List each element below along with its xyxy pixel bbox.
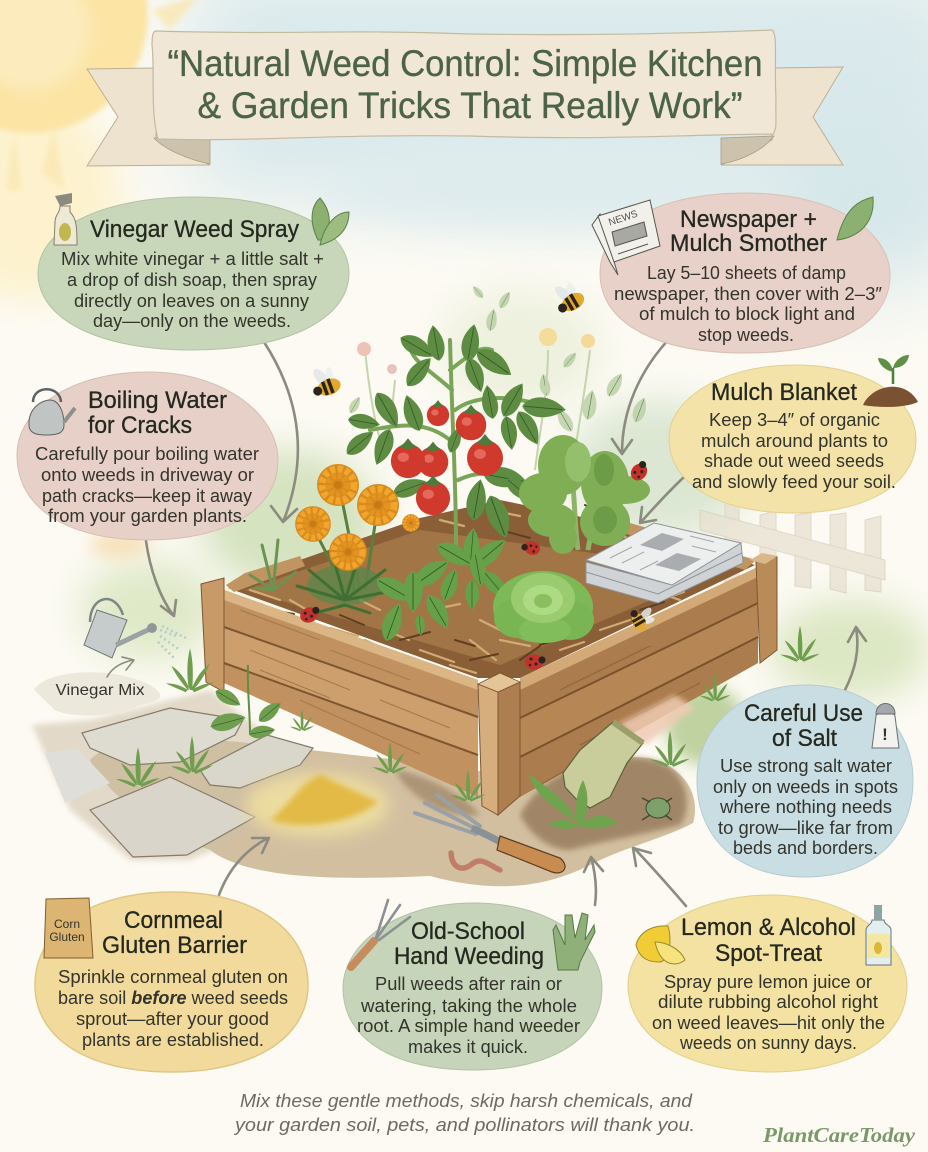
marigolds <box>250 464 420 613</box>
heading line 2: for Cracks <box>88 412 192 439</box>
icon: glove <box>553 913 595 970</box>
arm <box>618 695 695 745</box>
arrow: boiling water to path <box>146 541 176 616</box>
icon: ladybug rim <box>298 604 322 625</box>
panel: vinegar weed spray <box>38 193 349 350</box>
soil and mulch <box>228 500 755 678</box>
icon: newspaper label: NEWS <box>607 209 640 228</box>
panel: boiling water for cracks <box>17 372 278 540</box>
icon: leaf <box>312 198 349 245</box>
icon: newspaper <box>592 200 660 275</box>
panel: cornmeal gluten barrier <box>35 892 308 1072</box>
label: vinegar mix: Vinegar Mix <box>56 682 144 699</box>
icon: corn gluten bag: Gluten <box>49 930 85 944</box>
heading line 1: Newspaper + <box>680 206 817 233</box>
body text: shade out weed seeds <box>704 451 884 471</box>
arrow: salt to grass <box>845 627 866 690</box>
watering can <box>84 599 186 658</box>
background foliage <box>80 284 928 765</box>
lettuce <box>493 571 594 643</box>
fence <box>700 496 885 593</box>
raised garden bed <box>201 500 778 815</box>
panel: old-school hand weeding <box>343 900 602 1070</box>
body text: Lay 5–10 sheets of damp <box>647 263 846 283</box>
icon: soil sprout <box>863 355 918 407</box>
body text: of mulch to block light and <box>639 304 855 324</box>
icon: sun <box>0 0 200 190</box>
icon: spray bottle <box>54 193 77 245</box>
body text <box>61 249 324 331</box>
body text: dilute rubbing alcohol right <box>658 992 878 1012</box>
title banner <box>87 30 843 166</box>
icon: leaf <box>837 197 873 240</box>
heading line 1: Careful Use <box>744 700 863 727</box>
body text: Carefully pour boiling water <box>35 444 259 464</box>
arrow: vinegar mix <box>107 657 134 677</box>
body text: on weed leaves—hit only the <box>652 1013 885 1033</box>
arrow: newspaper to bed <box>612 338 670 454</box>
back rim <box>226 520 756 592</box>
brand mark: PlantCareToday <box>762 1123 916 1147</box>
body text: to grow—like far from <box>718 818 893 838</box>
body text: sprout—after your good <box>76 1009 269 1029</box>
banner body <box>152 30 776 140</box>
heading line 2: of Salt <box>772 725 837 752</box>
body text: and slowly feed your soil. <box>692 472 896 492</box>
body text: newspaper, then cover with 2–3″ <box>614 284 883 304</box>
body text: mulch around plants to <box>701 431 888 451</box>
panel: newspaper and mulch smother <box>592 193 890 353</box>
icon: hand weeder <box>351 900 410 967</box>
body text: Keep 3–4″ of organic <box>709 410 880 430</box>
body text: plants are established. <box>82 1030 264 1050</box>
heading line 1: Boiling Water <box>88 387 227 414</box>
post: front <box>478 673 520 815</box>
heading line 2: Spot-Treat <box>715 940 822 967</box>
body text: day—only on the weeds. <box>93 311 291 331</box>
heading line 1: Lemon & Alcohol <box>681 914 856 941</box>
body text: only on weeds in spots <box>713 777 898 797</box>
icon: corn gluten bag <box>44 898 93 958</box>
arrows <box>107 338 866 906</box>
chard plant <box>519 435 650 554</box>
heading line 2: Mulch Smother <box>670 230 827 257</box>
small weed sprig <box>250 540 296 590</box>
closing note: Mix these gentle methods, skip harsh chemicals, and <box>240 1090 693 1111</box>
ribbon tail: left <box>87 68 210 166</box>
arrow: lemon to weed <box>633 848 686 906</box>
small weeds <box>116 626 820 802</box>
body text: Use strong salt water <box>720 756 892 776</box>
body text: a drop of dish soap, then spray <box>67 270 317 290</box>
body text: watering, taking the whole <box>360 996 577 1016</box>
ribbon fold left <box>154 138 210 164</box>
arrow: mulch to bed <box>640 478 683 523</box>
arrow: cornmeal to pile <box>219 838 269 895</box>
body text: path cracks—keep it away <box>42 486 252 506</box>
arrow: vinegar to bed <box>264 342 298 522</box>
body text: Pull weeds after rain or <box>375 974 562 994</box>
panel: careful use of salt <box>697 685 913 877</box>
panel: mulch blanket <box>669 355 918 513</box>
body text: beds and borders. <box>733 838 878 858</box>
post: right <box>750 553 778 663</box>
title text line 2: & Garden Tricks That Really Work” <box>198 85 742 126</box>
gardening hand <box>528 695 695 829</box>
closing note <box>233 1090 695 1135</box>
body text: Mix white vinegar + a little salt + <box>61 249 324 269</box>
body text <box>35 444 259 526</box>
left wall <box>224 590 478 797</box>
tomato plant <box>342 323 567 545</box>
icon: ladybug front <box>525 654 546 670</box>
icon: ladybug soil <box>520 538 542 557</box>
weed in hand <box>528 773 618 829</box>
body text: where nothing needs <box>719 797 892 817</box>
icon: dropper bottle <box>866 905 891 965</box>
worm and beetle <box>451 798 672 870</box>
icon: bee top right <box>547 276 587 317</box>
body text <box>652 972 885 1053</box>
panel: lemon and alcohol spot-treat <box>628 895 907 1072</box>
body text <box>614 263 883 345</box>
body text: Sprinkle cornmeal gluten on <box>58 967 288 987</box>
icon: bee left <box>306 361 343 400</box>
heading: Mulch Blanket <box>711 379 857 406</box>
post: left <box>201 578 224 692</box>
arrow: hand weeding to hand <box>584 857 603 905</box>
body text: stop weeds. <box>698 325 794 345</box>
pale flowers <box>357 328 595 470</box>
heading line 2: Hand Weeding <box>394 943 544 970</box>
ground soil <box>90 738 695 886</box>
body text: bare soil before weed seeds <box>58 988 288 1008</box>
ribbon fold right <box>721 136 774 164</box>
basil plants <box>372 527 512 644</box>
body text: onto weeds in driveway or <box>41 465 254 485</box>
body text: directly on leaves on a sunny <box>74 291 309 311</box>
body text <box>692 410 896 492</box>
icon: bee on bed <box>627 601 660 634</box>
ribbon tail: right <box>721 67 843 165</box>
newspaper stack <box>586 523 743 603</box>
body text: Spray pure lemon juice or <box>664 972 872 992</box>
body text <box>58 967 288 1050</box>
body text <box>357 974 580 1057</box>
icon: kettle <box>29 389 75 435</box>
garden fork <box>415 795 565 873</box>
larger leafy weed <box>208 665 285 740</box>
heading: Vinegar Weed Spray <box>90 216 299 243</box>
stepping stones <box>34 672 313 857</box>
heading line 1: Cornmeal <box>124 907 223 934</box>
ground and path <box>32 672 695 886</box>
icon: ladybug leaf <box>627 458 652 484</box>
body text: makes it quick. <box>408 1037 528 1057</box>
cornmeal pile <box>246 773 390 837</box>
heading line 1: Old-School <box>411 918 525 945</box>
closing note: your garden soil, pets, and pollinators will thank you. <box>233 1114 695 1135</box>
body text <box>713 756 898 858</box>
icon: salt shaker: ! <box>882 725 888 744</box>
glove <box>563 722 643 808</box>
body text: from your garden plants. <box>48 506 247 526</box>
body text: weeds on sunny days. <box>679 1033 857 1053</box>
icon: worm <box>451 853 500 870</box>
right wall <box>520 567 758 797</box>
icon: lemon <box>636 926 685 964</box>
body text: root. A simple hand weeder <box>357 1016 580 1036</box>
path tint <box>32 690 310 860</box>
icon: beetle <box>642 798 672 820</box>
insects on bed <box>298 276 660 670</box>
icon: salt shaker <box>872 704 899 748</box>
title text: “Natural Weed Control: Simple Kitchen <box>168 43 762 84</box>
heading line 2: Gluten Barrier <box>102 932 247 959</box>
icon: corn gluten bag: Corn <box>54 917 80 931</box>
